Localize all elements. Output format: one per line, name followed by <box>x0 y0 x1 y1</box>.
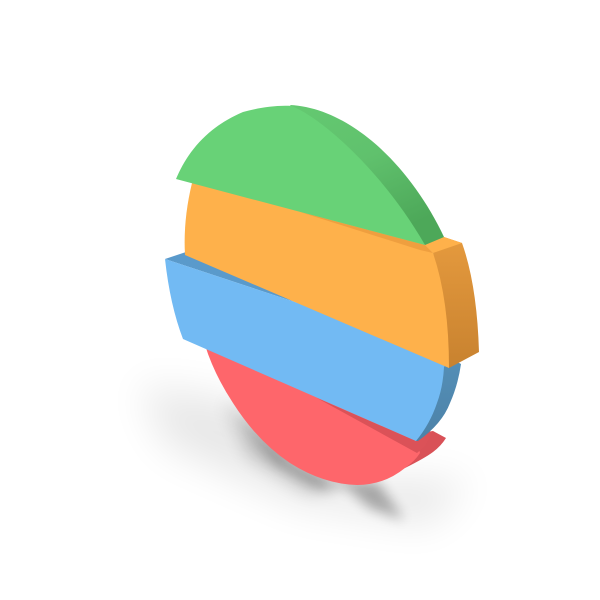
green side edge <box>290 105 444 245</box>
orange top ledge <box>415 235 462 253</box>
green front <box>176 106 425 245</box>
segment: green <box>176 105 444 245</box>
red side edge <box>400 431 446 468</box>
ground shadow <box>140 385 470 525</box>
blue front <box>165 259 449 441</box>
red inner shade <box>317 398 433 453</box>
segment: orange <box>185 183 479 368</box>
orange side edge <box>425 237 479 368</box>
orange shadow under green <box>300 212 433 253</box>
blue top edge <box>165 252 295 302</box>
segment: blue <box>165 252 461 441</box>
segment: red <box>205 345 446 485</box>
blue side edge <box>416 350 461 441</box>
red front <box>205 345 420 485</box>
orange front <box>185 183 449 368</box>
